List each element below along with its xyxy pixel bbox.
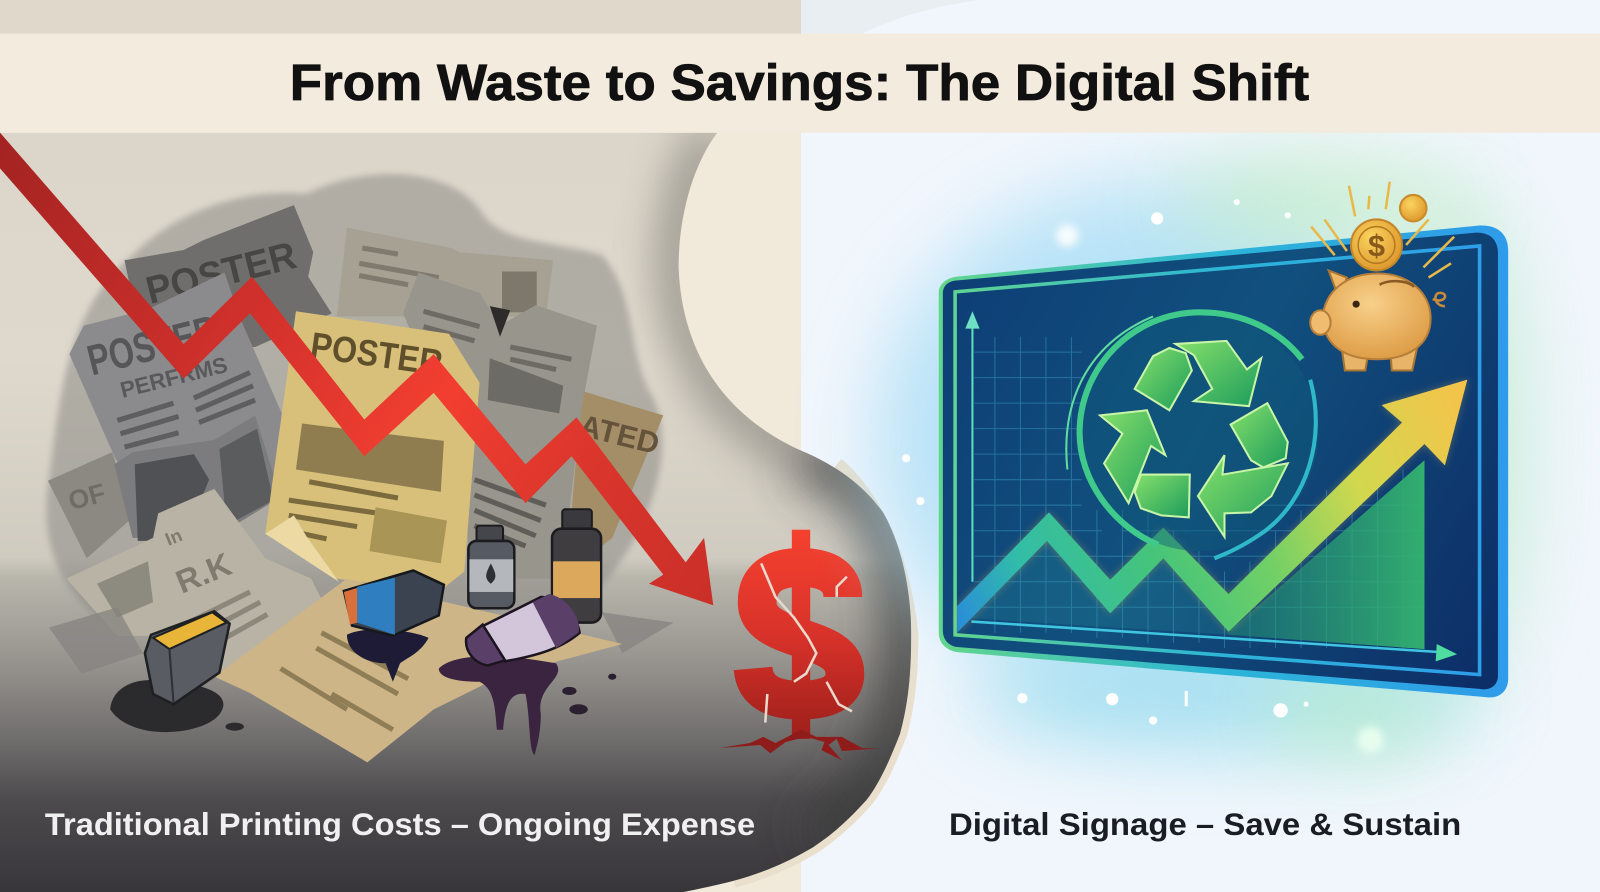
- label: digital signage: Digital Signage – Save & Sustain: [949, 806, 1461, 842]
- icon: piggy bank: [1310, 270, 1445, 370]
- poster: front gray: POSTER: [83, 307, 223, 385]
- icon: cracked dollar sign: [719, 530, 880, 760]
- ink puddle: left: [110, 680, 223, 732]
- icon: rays: [1311, 182, 1454, 278]
- digital screen: [939, 182, 1508, 697]
- poster: far left: [48, 452, 133, 558]
- panel: traditional printing costs: [0, 133, 918, 892]
- icon: dollar coin: $: [1368, 229, 1385, 263]
- area under chart: [1229, 460, 1424, 649]
- poster: tan right: ATED: [576, 409, 663, 461]
- ground shadow: [49, 607, 673, 674]
- arrow: rising growth trend: [957, 380, 1467, 633]
- icon: ink cartridge, blue: [344, 571, 444, 682]
- poster: light crumpled: R.K: [170, 545, 237, 600]
- icon: ink cartridge, yellow: [145, 611, 230, 704]
- poster: light crumpled: In: [162, 524, 185, 550]
- panel: digital signage: [878, 158, 1531, 842]
- poster: tan right: [566, 391, 663, 575]
- poster: dark gray back: [124, 205, 332, 347]
- axis: horizontal: [971, 622, 1457, 661]
- illustration: pile of posters: [48, 205, 673, 762]
- glow background: [878, 158, 1531, 750]
- paper on floor: [214, 579, 622, 762]
- icon: recycling symbol: [1066, 312, 1318, 558]
- icon: ink bottle, amber label: [552, 509, 601, 623]
- poster: yellow front: POSTER: [308, 325, 445, 384]
- poster: torn gray right: [403, 272, 597, 579]
- poster: back tan-gray: [337, 228, 553, 316]
- poster: front gray: PERFRMS: [118, 352, 230, 403]
- axis: vertical: [965, 311, 980, 582]
- title: From Waste to Savings: The Digital Shift: [290, 54, 1309, 111]
- poster: far left: OF: [65, 478, 109, 516]
- icon: spilled purple ink bottle: [226, 594, 616, 755]
- icon: small gold coin: [1400, 195, 1427, 221]
- arrow: falling red trend: [0, 133, 713, 605]
- poster: dark gray back: POSTER: [142, 234, 301, 313]
- label: traditional printing costs: Traditional Printing Costs – Ongoing Expense: [45, 806, 755, 842]
- poster: front gray: [69, 272, 283, 541]
- sparkles: [902, 199, 1384, 753]
- icon: dollar coin: [1351, 219, 1402, 270]
- smudge shadow: [46, 174, 662, 623]
- title band: [0, 34, 1600, 133]
- icon: ink bottle, black label: [468, 526, 514, 608]
- poster: light crumpled: [66, 489, 332, 677]
- chart grid: [974, 337, 1424, 648]
- poster: yellow front: [265, 311, 480, 592]
